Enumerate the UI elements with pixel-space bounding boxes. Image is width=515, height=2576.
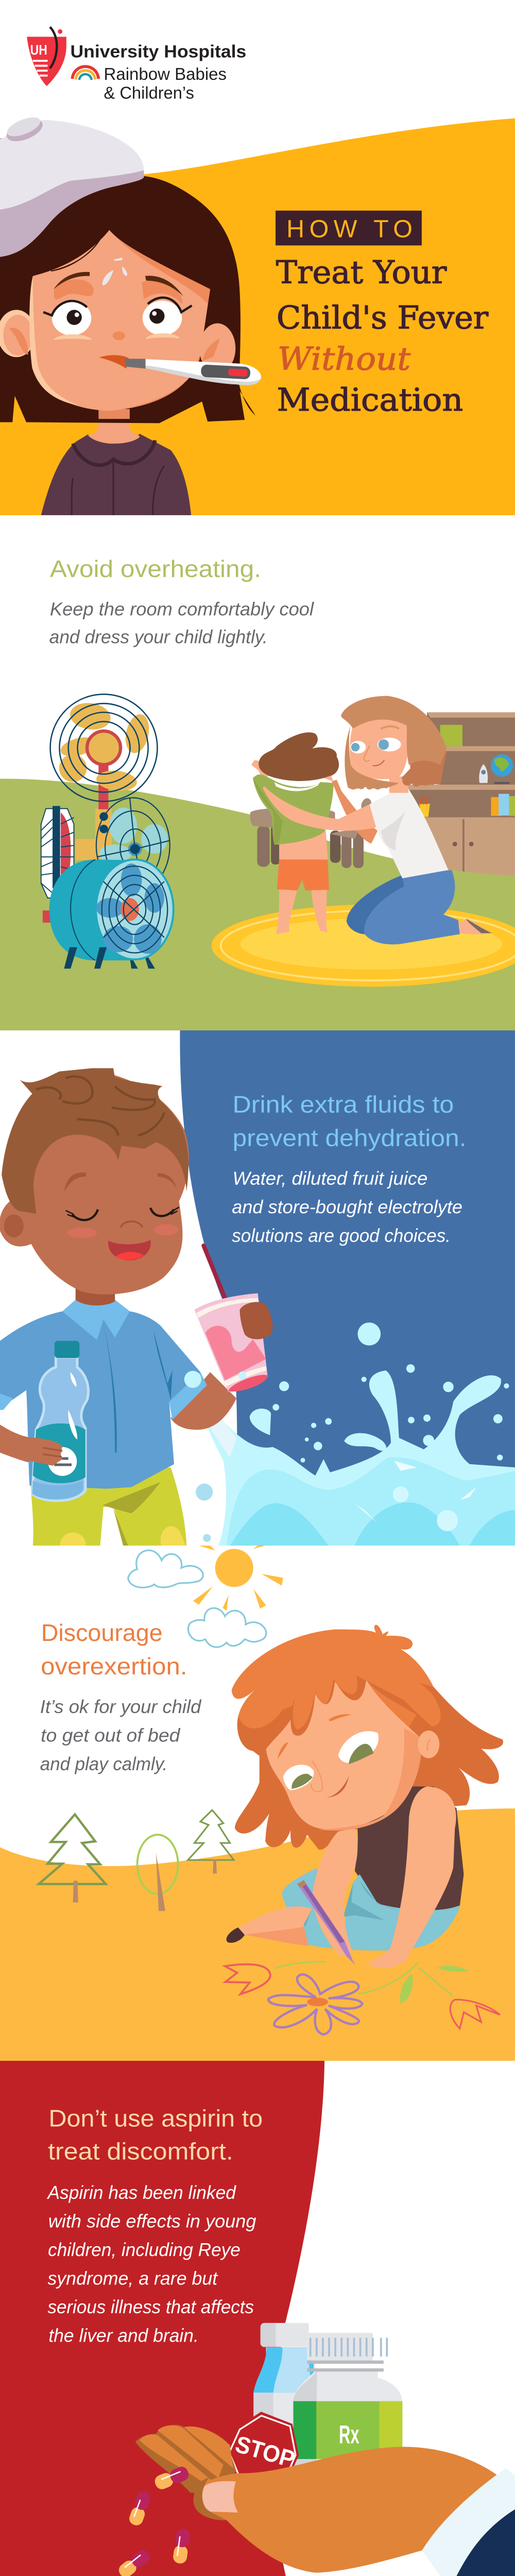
title: Without: [278, 341, 411, 377]
section: hero: [0, 26, 515, 515]
blue panel: [180, 1030, 515, 1546]
icon: drawn trees: [39, 1810, 234, 1911]
body text: solutions are good choices.: [232, 1226, 451, 1246]
illustration: drawn flower center and leaves: [307, 1965, 469, 2006]
body text: serious illness that affects: [47, 2297, 254, 2317]
icon: stop sign: STOP: [232, 2430, 298, 2473]
body text: [46, 2182, 256, 2346]
logo: University Hospitals Rainbow Babies: Rainbow Babies: [104, 65, 227, 84]
body text: the liver and brain.: [48, 2325, 199, 2346]
logo: University Hospitals Rainbow Babies: UH: [30, 42, 47, 58]
heading: prevent dehydration.: [233, 1124, 467, 1151]
body text: and dress your child lightly.: [49, 627, 268, 648]
heading: Discourage: [41, 1619, 163, 1646]
heading: [41, 1619, 187, 1680]
section: avoid overheating: [0, 555, 515, 1030]
icon: clouds: [128, 1550, 266, 1647]
illustration: flower drawing: [225, 1962, 500, 2035]
illustration: water splash: [196, 1323, 515, 1546]
icon: sun: [193, 1546, 283, 1611]
illustration: sick girl with ice pack and thermometer: [0, 113, 261, 515]
body text: [232, 1168, 462, 1246]
illustration: side fan: [41, 806, 74, 923]
illustration: mother: [263, 696, 492, 944]
illustration: boy with bottle and cup: [0, 1068, 272, 1559]
body text: with side effects in young: [48, 2211, 256, 2231]
illustration: child changing shirt: [251, 733, 339, 934]
section: aspirin: [0, 2061, 515, 2576]
illustration: Rx bottle: Rx: [339, 2420, 359, 2449]
heading: [48, 2105, 263, 2164]
illustration: teal desk fan: [96, 798, 170, 893]
illustration: yellow standing fan: [50, 694, 157, 861]
body text: [49, 599, 314, 648]
body text: and store-bought electrolyte: [232, 1197, 462, 1217]
heading: [233, 1091, 467, 1151]
orange-yellow ground: [0, 1808, 515, 2061]
illustration: blue medicine bottle: [253, 2323, 323, 2455]
shelves and cabinet: [407, 713, 515, 876]
title: Child's Fever: [277, 300, 489, 336]
title: Medication: [277, 382, 463, 418]
heading: Avoid overheating.: [50, 555, 261, 582]
body text: to get out of bed: [41, 1725, 181, 1746]
rug: [212, 905, 515, 987]
logo: University Hospitals Rainbow Babies: University Hospitals: [70, 42, 246, 62]
body text: Aspirin has been linked: [46, 2182, 236, 2203]
body text: children, including Reye: [48, 2240, 241, 2260]
body text: syndrome, a rare but: [47, 2268, 218, 2289]
body text: and play calmly.: [40, 1754, 167, 1774]
green ground: [0, 778, 515, 1030]
logo: University Hospitals Rainbow Babies: & Children’s: [104, 83, 194, 103]
illustration: falling pills: [116, 2465, 191, 2576]
section: discourage overexertion: [0, 1546, 515, 2061]
heading: Don’t use aspirin to: [48, 2105, 263, 2132]
heading: Drink extra fluids to: [233, 1091, 454, 1117]
yellow wave background: [0, 118, 515, 515]
heading: treat discomfort.: [48, 2138, 233, 2164]
icon: stop sign: [226, 2412, 299, 2485]
illustration: girl drawing: [226, 1625, 503, 1968]
red panel: [0, 2061, 324, 2576]
body text: It’s ok for your child: [40, 1697, 201, 1717]
label: how to: HOW TO: [286, 215, 413, 243]
label: how to: [276, 211, 422, 245]
illustration: Rx bottle: [294, 2333, 402, 2478]
body text: Water, diluted fruit juice: [233, 1168, 427, 1189]
section: drink extra fluids: [0, 1030, 515, 1546]
body text: [40, 1697, 201, 1774]
title: Treat Your: [276, 255, 447, 291]
logo: University Hospitals Rainbow Babies: [27, 27, 246, 103]
illustration: large blue drum fan: [49, 859, 174, 969]
title: [276, 255, 489, 418]
heading: overexertion.: [41, 1653, 187, 1680]
body text: Keep the room comfortably cool: [50, 599, 314, 620]
illustration: stools: [250, 798, 371, 868]
illustration: hand and sleeve: [135, 2425, 515, 2576]
